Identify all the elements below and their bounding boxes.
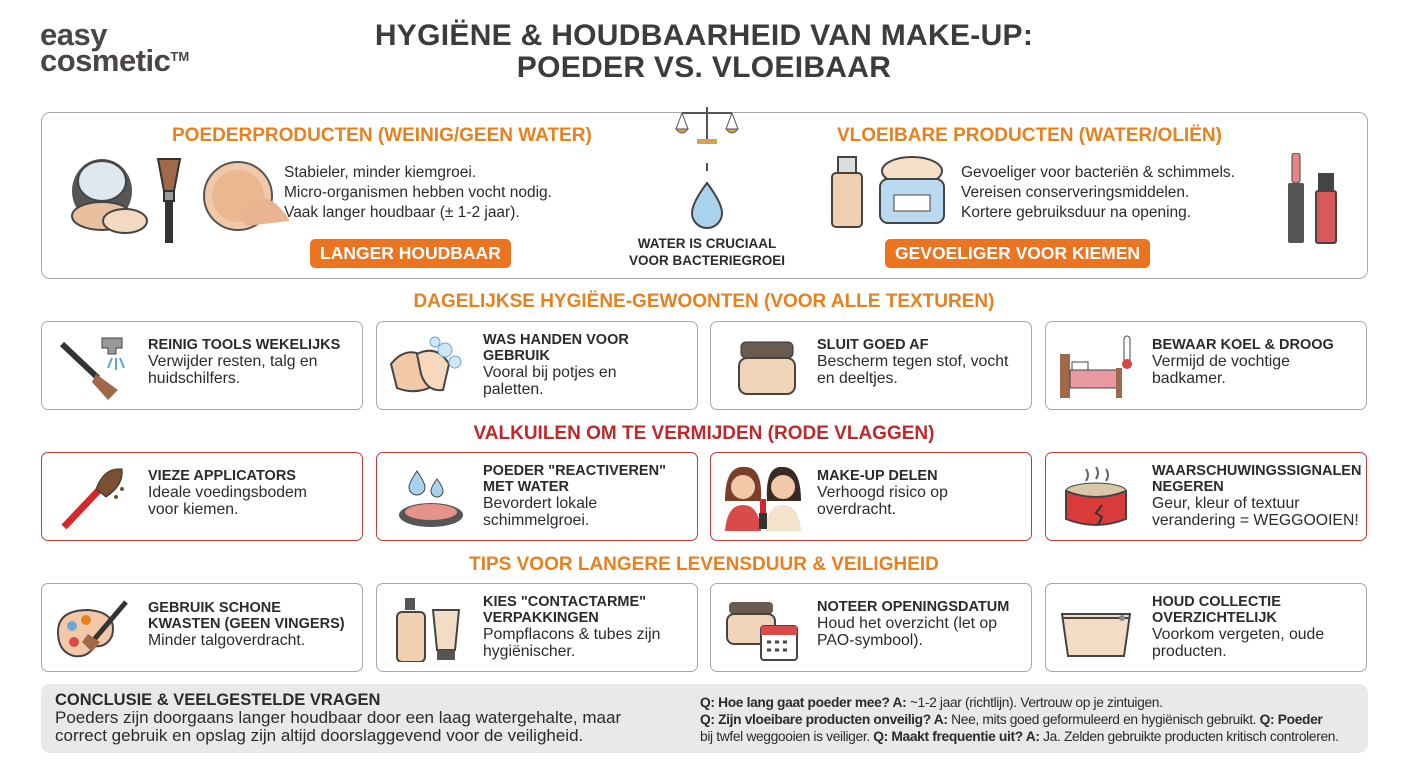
card: bewaar koel: Vermijd de vochtige [1152,353,1290,370]
text: vloeibaar: Kortere gebruiksduur na opening. [961,204,1191,221]
card: reinig tools: REINIG TOOLS WEKELIJKS [148,337,340,353]
title: POEDER VS. VLOEIBAAR [517,51,891,84]
icon: dirty brush [62,468,124,530]
card: sluit goed af: en deeltjes. [817,370,898,387]
card: vieze applicators: voor kiemen. [148,501,238,518]
text: poeder: Micro-organismen hebben vocht nodig. [284,184,552,201]
card: poeder reactiveren: Bevordert lokale [483,495,597,512]
pill: gevoeliger [885,239,1150,268]
pill: langer houdbaar [310,239,511,268]
icons: liquid products [831,156,945,228]
card: poeder reactiveren [376,452,698,541]
card: schone kwasten: Minder talgoverdracht. [148,632,305,649]
card: contactarme verpakkingen: VERPAKKINGEN [483,610,599,626]
title [375,19,1033,84]
card: poeder reactiveren: POEDER "REACTIVEREN" [483,463,666,479]
logo: easy [40,17,107,52]
heading: dagelijkse hygiene: DAGELIJKSE HYGIËNE-GEWOONTEN (VOOR ALLE TEXTUREN) [414,291,994,312]
card: schone kwasten: KWASTEN (GEEN VINGERS) [148,616,345,632]
text: poeder [284,164,552,221]
logo [40,17,189,78]
card: was handen: GEBRUIK [483,348,550,364]
card: contactarme verpakkingen [376,583,698,672]
text: vloeibaar: Vereisen conserveringsmiddelen. [961,184,1189,201]
card: was handen: Vooral bij potjes en [483,364,616,381]
card: was handen: paletten. [483,381,544,398]
card: sluit goed af: SLUIT GOED AF [817,337,928,353]
card: reinig tools [41,321,363,410]
card: poeder reactiveren: schimmelgroei. [483,512,589,529]
panel: comparison [41,112,1368,279]
conclusion text: correct gebruik en opslag zijn altijd doorslaggevend voor de veiligheid. [55,726,583,745]
text: water is cruciaal: WATER IS CRUCIAAL [638,236,776,251]
title: HYGIËNE & HOUDBAARHEID VAN MAKE-UP: [375,19,1033,52]
card: make-up delen: Verhoogd risico op [817,484,948,501]
pill: gevoeliger: GEVOELIGER VOOR KIEMEN [895,243,1140,263]
text: poeder: Stabieler, minder kiemgroei. [284,164,476,181]
icon: washing hands [390,336,462,392]
text: water is cruciaal: VOOR BACTERIEGROEI [629,253,785,268]
faq text: Q: Hoe lang gaat poeder mee? A: ~1-2 jaar (richtlijn). Vertrouw op je zintuigen. [700,695,1163,710]
heading: valkuilen: VALKUILEN OM TE VERMIJDEN (RODE VLAGGEN) [474,423,934,444]
card: houd collectie overzichtelijk [1045,583,1367,672]
heading: tips: TIPS VOOR LANGERE LEVENSDUUR & VEILIGHEID [469,554,939,575]
icon: palette and brush [57,600,128,658]
card: was handen [376,321,698,410]
icon: lipgloss [1288,153,1337,244]
logo: cosmeticTM [40,43,189,78]
card: noteer openingsdatum: NOTEER OPENINGSDATUM [817,599,1009,615]
icon: powder with drops [399,470,463,527]
card: waarschuwingssignalen: WAARSCHUWINGSSIGNALEN [1152,463,1361,479]
icon: two women [725,466,801,531]
heading: vloeibaar: VLOEIBARE PRODUCTEN (WATER/OLIËN) [837,125,1222,146]
card: make-up delen: overdracht. [817,501,896,518]
icon: pump and tube [396,598,460,662]
card: schone kwasten [41,583,363,672]
faq text [700,695,1339,744]
card: schone kwasten: GEBRUIK SCHONE [148,600,281,616]
icon: brush under tap [60,338,125,400]
conclusion text [55,691,621,745]
conclusion text: Poeders zijn doorgaans langer houdbaar door een laag watergehalte, maar [55,708,621,727]
card: noteer openingsdatum [710,583,1032,672]
icon: jar and calendar [726,602,798,661]
card: contactarme verpakkingen: hygiënischer. [483,643,575,660]
faq text: Q: Zijn vloeibare producten onveilig? A: Nee, mits goed geformuleerd en hygiënisch gebruikt. Q: Poeder [700,712,1322,727]
text: water is cruciaal [629,236,785,268]
card: noteer openingsdatum: PAO-symbool). [817,632,923,649]
card: reinig tools: Verwijder resten, talg en [148,353,317,370]
panel: conclusie & faq [41,684,1368,753]
card: was handen: WAS HANDEN VOOR [483,332,629,348]
card: contactarme verpakkingen: Pompflacons & tubes zijn [483,626,660,643]
card: waarschuwingssignalen: NEGEREN [1152,479,1224,495]
card: houd collectie overzichtelijk: producten. [1152,643,1227,660]
card: poeder reactiveren: MET WATER [483,479,569,495]
icon: spoiled jar [1065,466,1127,526]
conclusion text: CONCLUSIE & VEELGESTELDE VRAGEN [55,691,380,709]
card: bewaar koel: BEWAAR KOEL & DROOG [1152,337,1334,353]
card: sluit goed af [710,321,1032,410]
card: vieze applicators: Ideale voedingsbodem [148,484,307,501]
icons: powder products [71,158,290,243]
card: sluit goed af: Bescherm tegen stof, vocht [817,353,1008,370]
card: bewaar koel [1045,321,1367,410]
text: vloeibaar [961,164,1235,221]
card: vieze applicators: VIEZE APPLICATORS [148,468,296,484]
card: make-up delen [710,452,1032,541]
pill: langer houdbaar: LANGER HOUDBAAR [320,243,501,263]
card: make-up delen: MAKE-UP DELEN [817,468,938,484]
icon: makeup bag [1060,613,1132,657]
faq text: bij twfel weggooien is veiliger. Q: Maakt frequentie uit? A: Ja. Zelden gebruikte producten kritisch controleren. [700,729,1339,744]
card: houd collectie overzichtelijk: Voorkom vergeten, oude [1152,626,1324,643]
card: houd collectie overzichtelijk: OVERZICHTELIJK [1152,610,1277,626]
text: poeder: Vaak langer houdbaar (± 1-2 jaar). [284,204,520,221]
card: waarschuwingssignalen: verandering = WEGGOOIEN! [1152,512,1359,529]
icon: scale and water drop [675,107,739,229]
card: bewaar koel: badkamer. [1152,370,1226,387]
card: contactarme verpakkingen: KIES "CONTACTARME" [483,594,646,610]
card: waarschuwingssignalen: Geur, kleur of textuur [1152,495,1300,512]
card: reinig tools: huidschilfers. [148,370,240,387]
card: houd collectie overzichtelijk: HOUD COLLECTIE [1152,594,1281,610]
text: vloeibaar: Gevoeliger voor bacteriën & schimmels. [961,164,1235,181]
card: vieze applicators [41,452,363,541]
icon: bed and thermometer [1060,336,1132,398]
card: waarschuwingssignalen [1045,452,1367,541]
icon: jar [738,342,796,395]
heading: poeder: POEDERPRODUCTEN (WEINIG/GEEN WATER) [172,125,592,146]
card: noteer openingsdatum: Houd het overzicht (let op [817,615,997,632]
